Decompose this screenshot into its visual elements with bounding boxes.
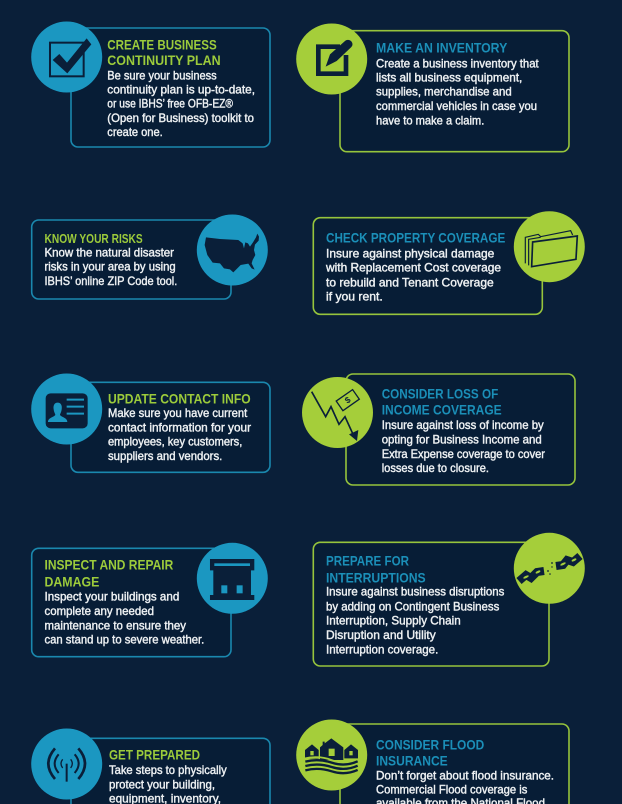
body text — [44, 246, 177, 288]
body text: IBHS’ online ZIP Code tool. — [44, 274, 177, 288]
body text: Insure against loss of income by — [382, 418, 544, 432]
icon: antenna signal — [48, 748, 85, 782]
panel: make an inventory — [296, 24, 569, 152]
body text: Interruption coverage. — [326, 642, 438, 656]
body text: complete any needed — [44, 604, 154, 618]
panel: inspect and repair damage — [32, 543, 268, 657]
body text: Be sure your business — [107, 68, 217, 82]
body text: if you rent. — [326, 290, 383, 304]
panel: get prepared — [31, 728, 270, 804]
icon: checkbox — [50, 38, 91, 76]
heading — [382, 385, 502, 417]
body text — [376, 768, 554, 804]
body text: with Replacement Cost coverage — [325, 261, 501, 275]
heading: INSURANCE — [376, 752, 448, 768]
body text: lists all business equipment, — [376, 70, 522, 84]
body text: Don’t forget about flood insurance. — [376, 768, 554, 782]
body text: can stand up to severe weather. — [44, 632, 204, 646]
heading: MAKE AN INVENTORY — [376, 40, 508, 56]
body text: by adding on Contingent Business — [326, 599, 499, 613]
heading — [376, 736, 484, 768]
body text: or use IBHS’ free OFB-EZ® — [107, 97, 233, 111]
body text: opting for Business Income and — [382, 432, 542, 446]
body text: to rebuild and Tenant Coverage — [326, 275, 494, 289]
icon: broken chain — [519, 556, 580, 581]
body text: risks in your area by using — [44, 260, 176, 274]
body text: contact information for your — [108, 421, 251, 435]
body text: Commercial Flood coverage is — [376, 782, 527, 796]
body text: suppliers and vendors. — [108, 449, 222, 463]
heading: CREATE BUSINESS — [107, 36, 217, 52]
body text: continuity plan is up-to-date, — [107, 82, 255, 96]
body text: supplies, merchandise and — [376, 85, 512, 99]
icon: falling income — [312, 390, 359, 441]
heading — [107, 36, 221, 68]
heading: CONSIDER FLOOD — [376, 736, 484, 752]
body text: Take steps to physically — [109, 763, 227, 777]
panel: know your risks — [32, 214, 268, 299]
panel: prepare for interruptions — [313, 533, 585, 666]
body text: Interruption, Supply Chain — [326, 614, 461, 628]
body text — [376, 56, 539, 127]
body text: employees, key customers, — [108, 435, 242, 449]
heading: CONTINUITY PLAN — [107, 52, 221, 68]
icon: building — [210, 559, 254, 600]
icon: flooded houses — [303, 738, 360, 773]
icon: US map — [205, 234, 259, 272]
body text: have to make a claim. — [376, 113, 484, 127]
panel: create business continuity plan — [31, 22, 270, 147]
icon: folder — [525, 231, 577, 267]
body text: commercial vehicles in case you — [376, 99, 537, 113]
body text: Insure against physical damage — [326, 246, 495, 260]
icon: pencil on notepad — [318, 40, 352, 74]
panel: update contact info — [31, 374, 270, 472]
body text: Know the natural disaster — [44, 246, 174, 260]
heading: CHECK PROPERTY COVERAGE — [326, 230, 505, 246]
body text: maintenance to ensure they — [44, 618, 186, 632]
body text — [44, 590, 204, 646]
body text: Make sure you have current — [108, 406, 248, 420]
heading — [44, 557, 173, 589]
heading — [326, 553, 426, 585]
panel: check property coverage — [313, 211, 585, 314]
body text: losses due to closure. — [382, 461, 489, 475]
heading: INTERRUPTIONS — [326, 569, 426, 585]
heading: UPDATE CONTACT INFO — [108, 390, 251, 406]
icon: ID card — [46, 393, 88, 428]
body text: Insure against business disruptions — [326, 585, 504, 599]
heading: PREPARE FOR — [326, 553, 409, 569]
body text: (Open for Business) toolkit to — [107, 111, 254, 125]
body text — [107, 68, 255, 139]
body text — [325, 246, 501, 304]
body text: protect your building, — [109, 777, 215, 791]
body text: Extra Expense coverage to cover — [382, 447, 545, 461]
heading: INCOME COVERAGE — [382, 401, 502, 417]
body text — [109, 763, 227, 804]
heading: INSPECT AND REPAIR — [44, 557, 173, 573]
heading: CONSIDER LOSS OF — [382, 385, 499, 401]
icon: falling income: $ — [343, 394, 353, 405]
body text: Inspect your buildings and — [44, 590, 179, 604]
heading: DAMAGE — [44, 573, 99, 589]
body text — [326, 585, 504, 656]
panel: consider flood insurance — [296, 720, 569, 804]
body text: Create a business inventory that — [376, 56, 539, 70]
panel: consider loss of income coverage — [302, 374, 575, 485]
heading: GET PREPARED — [109, 746, 200, 762]
body text: create one. — [107, 125, 163, 139]
body text: Disruption and Utility — [326, 628, 436, 642]
heading: KNOW YOUR RISKS — [44, 232, 143, 246]
body text — [382, 418, 545, 475]
body text — [108, 406, 251, 463]
